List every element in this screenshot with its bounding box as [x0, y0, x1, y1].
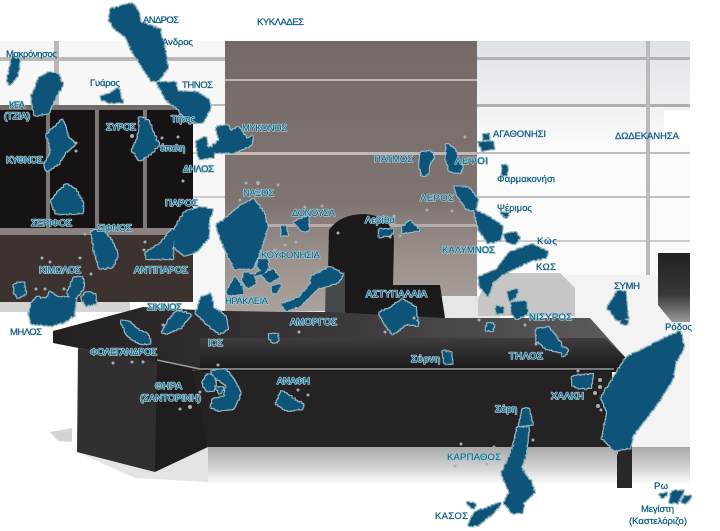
- label: ΠΑΡΟΣ: [165, 198, 198, 209]
- label: ΣΥΜΗ: [614, 281, 640, 292]
- desk highlight line: [157, 360, 614, 369]
- label: ΣΙΚΙΝΟΣ: [147, 302, 182, 313]
- label: ΤΗΛΟΣ: [509, 351, 543, 362]
- islet east of Levitha: [403, 222, 418, 232]
- Kalymnos: [475, 211, 502, 242]
- label: ΚΙΜΩΛΟΣ: [39, 265, 81, 276]
- wall: [225, 41, 477, 311]
- label: ΙΟΣ: [208, 338, 223, 349]
- label: ΑΜΟΡΓΟΣ: [290, 317, 337, 328]
- Symi islet: [622, 320, 627, 324]
- Milos: [30, 293, 75, 325]
- label: ΦΟΛΕΓΑΝΔΡΟΣ: [90, 347, 157, 358]
- Aspronisi: [217, 388, 222, 393]
- Antiparos: [147, 230, 175, 258]
- right window: [477, 41, 690, 291]
- label: Μακρόνησος: [6, 49, 57, 60]
- Mykonos: [213, 126, 252, 152]
- label: ΝΙΣΥΡΟΣ: [529, 312, 572, 323]
- office chair: [325, 214, 445, 318]
- desk accessories: [478, 273, 575, 316]
- desk pedestal side: [155, 358, 208, 472]
- label: ΚΑΛΥΜΝΟΣ: [442, 245, 495, 256]
- Thira: [212, 370, 240, 410]
- label: Σύρνη: [411, 354, 440, 365]
- desk front panel: [190, 371, 612, 447]
- Donousa: [295, 217, 308, 230]
- label: ΚΑΡΠΑΘΟΣ: [447, 452, 501, 463]
- label: ΚΟΥΦΟΝΗΣΙΑ: [261, 250, 321, 261]
- label: ΠΑΤΜΟΣ: [374, 154, 413, 165]
- region label: Dodecanese: ΔΩΔΕΚΑΝΗΣΑ: [615, 131, 680, 142]
- Irakleia: [227, 278, 243, 295]
- label: ΚΕΑ: [9, 100, 26, 111]
- Paros: [175, 208, 212, 255]
- Lipsi: [447, 145, 462, 173]
- label: ΗΡΑΚΛΕΙΑ: [225, 296, 269, 307]
- Koufonisia south: [263, 270, 278, 282]
- Tilos: [537, 328, 562, 352]
- Rhodes: [602, 332, 683, 450]
- Kea: [32, 73, 62, 115]
- label: Τήνος: [171, 114, 195, 125]
- Koufonisia: [258, 260, 268, 270]
- label: ΛΕΡΟΣ: [420, 193, 454, 204]
- region label: Cyclades: ΚΥΚΛΑΔΕΣ: [257, 17, 304, 28]
- Andros: [110, 4, 167, 80]
- label: ΣΙΦΝΟΣ: [97, 223, 132, 234]
- Delos: [197, 138, 213, 158]
- Sifnos: [92, 230, 117, 268]
- label: ΣΥΡΟΣ: [106, 122, 136, 133]
- Serifos: [52, 185, 82, 213]
- Naxos: [217, 200, 267, 268]
- label: ΘΗΡΑ: [155, 381, 183, 392]
- Kythnos: [45, 121, 74, 170]
- islands: Cyclades: [8, 4, 342, 410]
- label: (ΣΑΝΤΟΡΙΝΗ): [140, 393, 201, 404]
- Ro: [660, 494, 666, 497]
- label: ύπολη: [160, 143, 185, 154]
- small gray islets: [34, 134, 618, 468]
- label: ΑΝΤΙΠΑΡΟΣ: [134, 265, 188, 276]
- Nisyros: [512, 302, 527, 318]
- label: ΚΑΣΟΣ: [435, 511, 468, 522]
- floor under desk: [208, 447, 690, 485]
- label: Ρόδος: [665, 322, 692, 333]
- Agathonisi: [479, 142, 493, 150]
- desk leg: [617, 372, 632, 488]
- label: Λεβίθα: [365, 215, 396, 226]
- label: ΑΝΑΦΗ: [277, 376, 310, 387]
- label: ΚΥΘΝΟΣ: [6, 155, 43, 166]
- label: Γυάρος: [90, 78, 120, 89]
- Kasos: [469, 504, 500, 525]
- Karpathos: [502, 428, 534, 513]
- Anafi: [277, 392, 303, 410]
- label: Μεγίστη: [641, 504, 674, 515]
- Kos: [480, 245, 547, 295]
- Folegandros: [122, 322, 150, 343]
- cabinet: [0, 105, 193, 312]
- Symi: [608, 292, 627, 320]
- Armathia: [468, 503, 475, 508]
- label: Ρω: [654, 481, 669, 492]
- label: ΝΑΞΟΣ: [243, 188, 274, 199]
- label: Άνδρος: [162, 37, 193, 48]
- desk top: [53, 307, 630, 372]
- floor under pedestal: [77, 447, 208, 482]
- Sikinos: [163, 312, 190, 333]
- label: ΔΗΛΟΣ: [183, 164, 214, 175]
- Antimilos: [15, 283, 25, 297]
- label: ΣΕΡΙΦΟΣ: [31, 218, 72, 229]
- islet: [487, 324, 493, 330]
- Thirasia: [203, 375, 215, 390]
- islands: Dodecanese: [380, 135, 690, 525]
- desk pedestal front: [77, 348, 157, 472]
- label: Ψέριμος: [497, 203, 532, 214]
- Tilos islet: [563, 348, 567, 356]
- label: ΤΗΝΟΣ: [182, 80, 213, 91]
- desk edge band: [200, 338, 630, 372]
- label: ΜΗΛΟΣ: [10, 327, 42, 338]
- Kimolos: [68, 278, 83, 300]
- label: (ΤΖΙΑ): [4, 111, 30, 122]
- Tinos: [158, 83, 210, 122]
- Pserimos: [502, 213, 508, 217]
- Makronisos: [8, 58, 19, 84]
- label: ΑΓΑΘΟΝΗΣΙ: [493, 129, 546, 140]
- label: ΑΝΔΡΟΣ: [143, 15, 179, 26]
- islet south of Amorgos: [269, 334, 277, 342]
- islet near Donousa: [282, 227, 287, 235]
- pedestal shadow: [50, 428, 72, 442]
- chair body sides: [325, 270, 345, 318]
- Ios: [197, 295, 227, 333]
- right chair: [658, 253, 690, 322]
- Antikeros: [272, 285, 280, 292]
- behind-desk white area: [440, 296, 500, 320]
- label: (Καστελόριζο): [629, 516, 687, 527]
- label: Σάρη: [495, 404, 517, 415]
- label: ΧΑΛΚΗ: [551, 391, 584, 402]
- Saria: [520, 409, 532, 425]
- label: ΜΥΚΟΝΟΣ: [242, 123, 287, 134]
- label: ΛΕΨΟΙ: [455, 156, 488, 167]
- label: Κώς: [537, 236, 557, 247]
- Chalki: [573, 375, 592, 388]
- Leros: [455, 187, 477, 210]
- Farmakonisi: [503, 166, 507, 175]
- Amorgos: [282, 268, 342, 310]
- Schoinoussa: [243, 273, 255, 287]
- floor right of desk: [565, 275, 690, 485]
- Astypalaia: [380, 300, 417, 333]
- label: ΑΣΤΥΠΑΛΑΙΑ: [366, 289, 428, 300]
- Agathonisi dot: [484, 135, 488, 139]
- Syros: [133, 118, 158, 160]
- label: Φαρμακονήσι: [497, 174, 555, 185]
- Syrna: [443, 352, 452, 363]
- Polyaigos: [82, 293, 95, 305]
- Pserimos neighbour: [505, 233, 519, 243]
- left window: [0, 41, 225, 315]
- Kastellorizo: [670, 491, 683, 502]
- Strongyli: [682, 497, 690, 503]
- Patmos: [420, 152, 433, 175]
- Keros: [255, 267, 268, 275]
- Yali: [508, 290, 517, 300]
- Gyaros: [102, 89, 122, 102]
- label: ΚΩΣ: [536, 262, 556, 273]
- Pergousa: [497, 307, 503, 313]
- Levitha: [380, 230, 393, 236]
- label: ΔΟΝΟΥΣΑ: [292, 208, 336, 219]
